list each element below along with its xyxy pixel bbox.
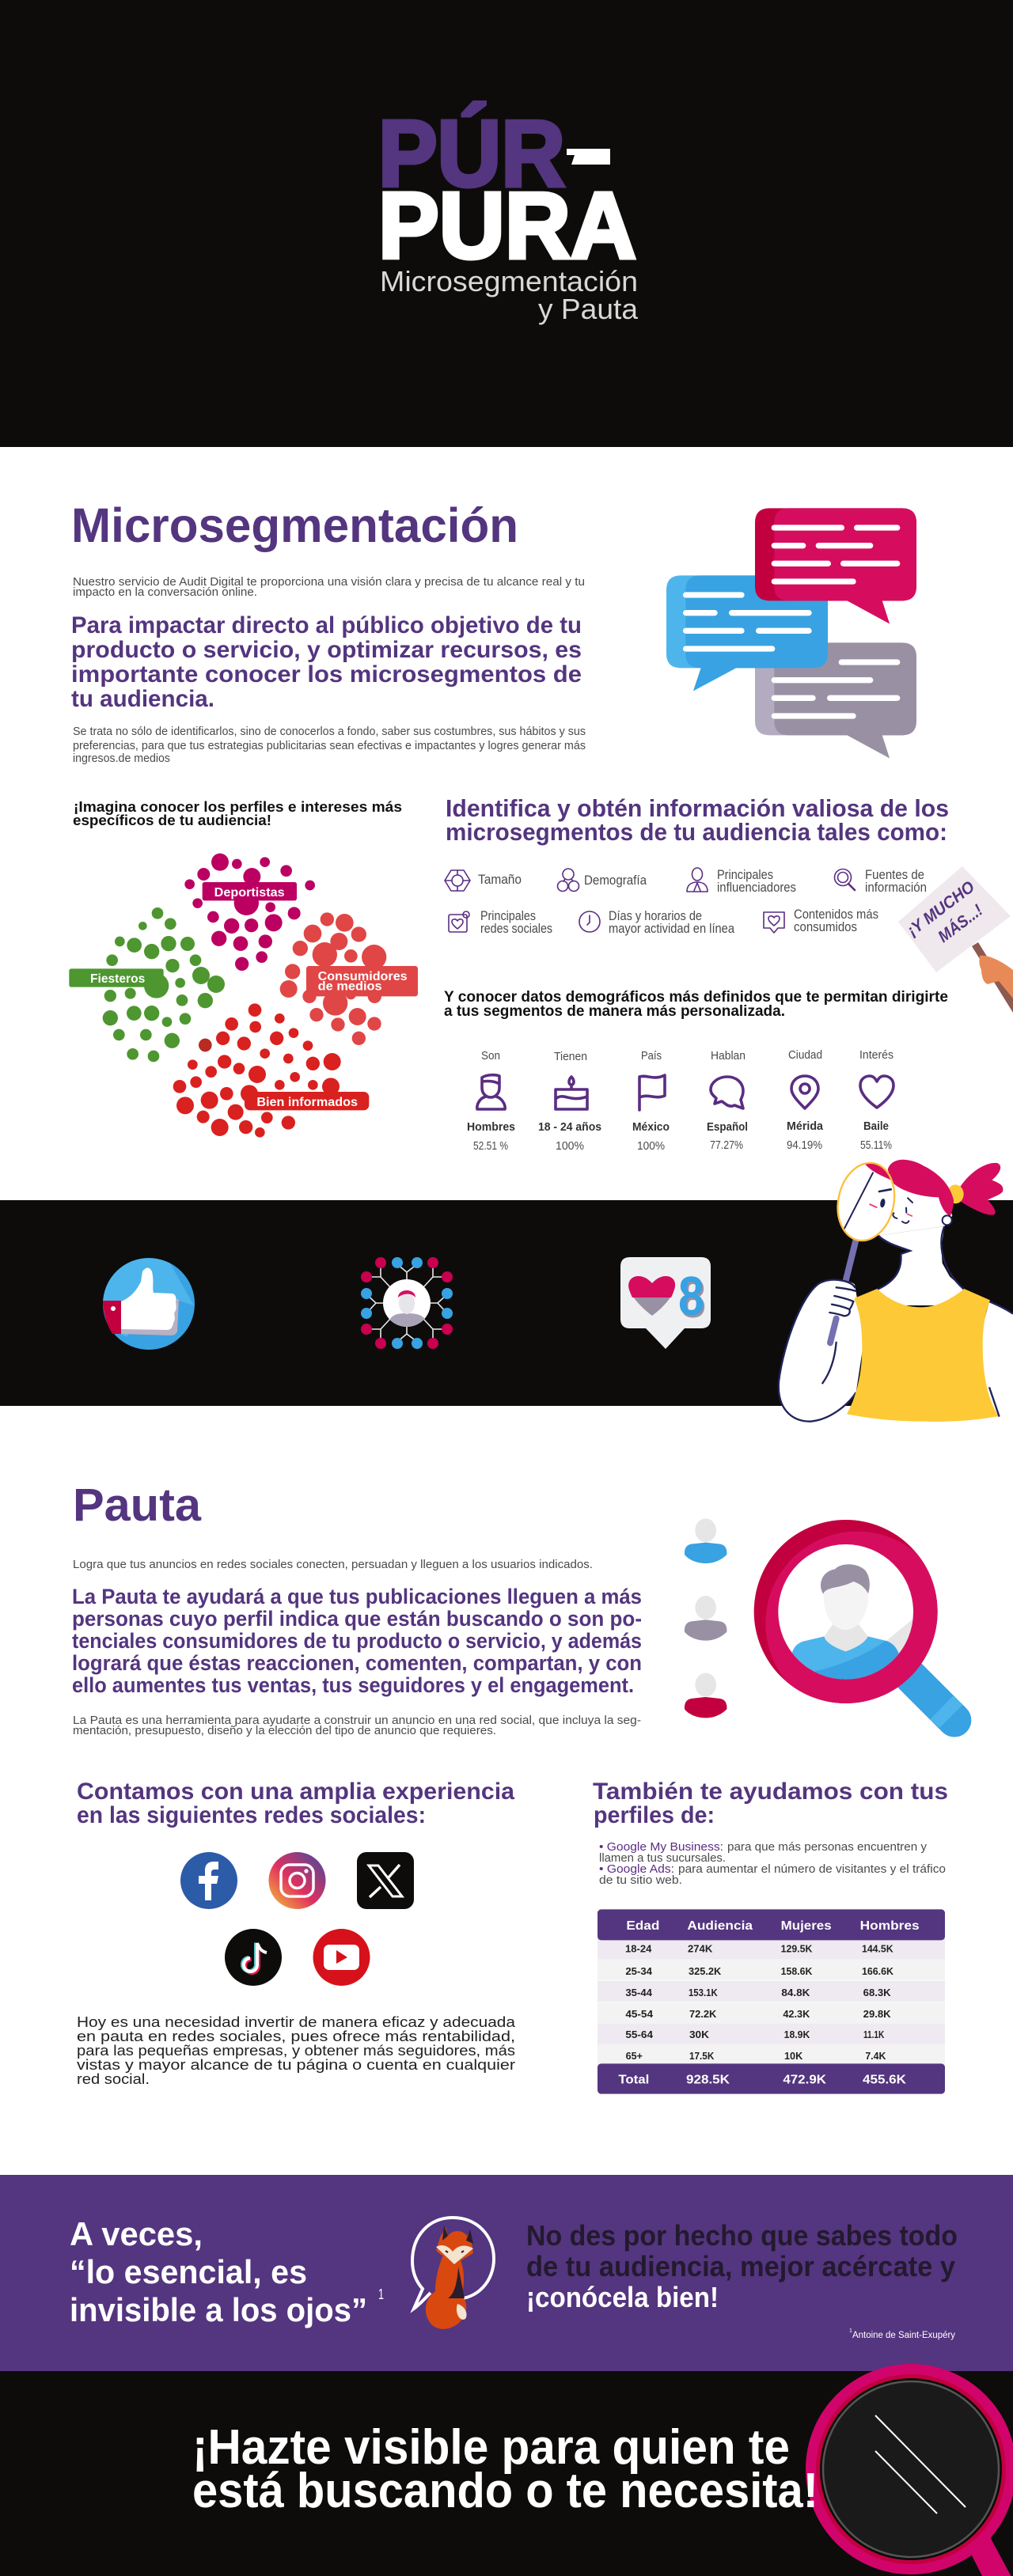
label: tamaño: Tamaño — [478, 873, 522, 887]
sign pole — [972, 942, 1013, 1013]
text block: no des por hecho: ¡conócela bien! — [526, 2281, 719, 2313]
heading: identifica y obtén información: Identifica y obtén información valiosa de los — [446, 794, 949, 822]
label: días y horarios — [609, 909, 735, 936]
chart: audience bubble clusters — [69, 854, 418, 1138]
table values: 55-64 — [625, 2029, 653, 2040]
table values: 129.5K — [781, 1943, 813, 1954]
cluster: Fiesteros — [69, 907, 225, 1062]
label: días y horarios: mayor actividad en línea — [609, 922, 735, 936]
person: blue — [685, 1518, 727, 1563]
arm and fingers lines — [822, 1287, 856, 1383]
quote: lo esencial: “lo esencial, es — [70, 2253, 307, 2290]
text block: pauta statement: La Pauta te ayudará a que tus publicaciones lleguen a más — [72, 1585, 642, 1608]
label: contenidos: consumidos — [794, 920, 857, 934]
face details — [893, 1198, 912, 1223]
heading: identifica y obtén información: microsegmentos de tu audiencia tales como: — [446, 818, 947, 846]
stat: Interés Baile: 55.11% — [860, 1139, 892, 1152]
stat: Interés Baile: Interés — [859, 1049, 893, 1062]
panel: bottom black band — [0, 2371, 1013, 2576]
table: audience by age — [598, 1909, 945, 2094]
speech bubble outline — [412, 2218, 494, 2309]
text block: no des por hecho: de tu audiencia, mejor acércate y — [526, 2250, 955, 2282]
glare lines — [875, 2415, 966, 2513]
lens glass — [823, 2381, 999, 2557]
table header: Edad — [626, 1919, 659, 1933]
text block: pauta statement: personas cuyo perfil indica que están buscando o son po- — [72, 1607, 642, 1631]
ponytail — [960, 1163, 1003, 1215]
table values: 10K — [784, 2051, 803, 2062]
hair tie — [947, 1184, 964, 1203]
stat: Hablan Español: Hablan — [711, 1050, 746, 1063]
stat: Ciudad Mérida: Ciudad — [788, 1049, 822, 1062]
list: google profiles: llamen a tus sucursales. — [599, 1851, 726, 1865]
fox tail tip — [457, 2304, 467, 2320]
logo word: PÚR: PÚR — [378, 101, 565, 206]
icon: tiktok — [225, 1929, 282, 1986]
table values: 35-44 — [625, 1987, 652, 1998]
quote: lo esencial: invisible a los ojos” — [70, 2291, 367, 2328]
illustration: protest sign with hand — [898, 866, 1013, 1013]
text block: no des por hecho — [526, 2219, 958, 2313]
table total: 472.9K — [783, 2073, 826, 2086]
table header: Mujeres — [781, 1919, 832, 1933]
list: google profiles: • Google My Business: — [599, 1840, 723, 1854]
handle — [967, 2536, 1013, 2576]
mirror handle — [830, 1240, 856, 1343]
label: días y horarios: Días y horarios de — [609, 909, 702, 923]
cluster: Deportistas — [184, 854, 315, 971]
cluster: Consumidores de medios — [280, 912, 418, 1045]
fox ears — [442, 2226, 473, 2244]
citation: 1 — [849, 2328, 852, 2334]
icon: fuentes de información — [834, 869, 855, 890]
cluster: Deportistas: Deportistas — [214, 886, 285, 900]
text block: intro: impacto en la conversación online. — [73, 586, 257, 599]
neck fill — [877, 1226, 964, 1305]
icons: social networks — [180, 1852, 414, 1986]
dark rim — [816, 2374, 1006, 2564]
table values — [625, 1943, 894, 2062]
stat: Son Hombres: Son — [481, 1050, 500, 1063]
lens — [820, 2378, 1002, 2560]
icon: like notification bubble: 8 — [680, 1267, 706, 1329]
panel: black band with icons — [0, 1200, 1013, 1406]
list: audience attributes — [445, 868, 927, 936]
subheading: imagina conocer los perfiles — [73, 799, 402, 828]
list: google profiles: para que más personas encuentren y — [727, 1840, 927, 1854]
table values: 18.9K — [784, 2029, 810, 2040]
stat: Hablan Español: Español — [707, 1121, 748, 1134]
fox face — [436, 2245, 473, 2264]
text block: intro: Nuestro servicio de Audit Digital te proporciona una visión clara y precisa de tu alcance real y tu — [73, 576, 585, 589]
text block: pauta explanation — [73, 1714, 641, 1737]
text block: explanation — [73, 725, 586, 765]
stat: País México: México — [632, 1121, 670, 1134]
text block: pauta intro: Logra que tus anuncios en redes sociales conecten, persuadan y lleguen a los usuarios indicados. — [73, 1558, 593, 1571]
shirt side line — [989, 1387, 1000, 1417]
illustration: girl with magnifying mirror — [779, 1157, 1013, 1422]
table total — [598, 2063, 945, 2094]
table values: 30K — [689, 2029, 710, 2040]
text block: necesidad de invertir: Hoy es una necesidad invertir de manera eficaz y adecuada — [77, 2013, 516, 2030]
text block: purple statement: tu audiencia. — [71, 686, 214, 712]
person in lens — [791, 1564, 914, 1688]
table values: 29.8K — [863, 2009, 892, 2020]
icon: influenciadores — [687, 868, 708, 892]
table values: 153.1K — [689, 1987, 718, 1998]
stats: demographic profile — [467, 1049, 893, 1153]
sign text second line: MÁS...! — [935, 901, 986, 946]
icon: instagram — [269, 1852, 326, 1909]
pink rim — [806, 2364, 1013, 2574]
stat: Son Hombres: 52.51 % — [473, 1140, 508, 1153]
label: influenciadores: Principales — [717, 868, 773, 882]
table values: 84.8K — [781, 1987, 810, 1998]
table header — [598, 1909, 945, 1940]
stat: Hablan Español: 77.27% — [710, 1139, 743, 1152]
table values: 45-54 — [625, 2009, 653, 2020]
cluster: Bien informados — [173, 1003, 369, 1138]
text block: purple statement: importante conocer los microsegmentos de — [71, 661, 582, 688]
label: redes sociales: Principales — [480, 909, 536, 923]
table values: 65+ — [626, 2051, 643, 2062]
left arm — [779, 1280, 865, 1422]
subheading: imagina conocer los perfiles: ¡Imagina conocer los perfiles e intereses más — [74, 799, 402, 815]
heading: también te ayudamos — [593, 1779, 948, 1828]
text block: datos demográficos: a tus segmentos de manera más personalizada. — [444, 1003, 785, 1020]
magnifier handle — [910, 1676, 963, 1728]
panel: purple quote band — [0, 2175, 1013, 2371]
cluster: Consumidores de medios: Consumidores — [318, 970, 408, 983]
table values: 72.2K — [689, 2009, 717, 2020]
right arm fill — [981, 1301, 1013, 1419]
table values: 11.1K — [863, 2029, 885, 2040]
fox body — [435, 2255, 464, 2301]
table values: 158.6K — [781, 1966, 813, 1977]
label: redes sociales — [480, 909, 552, 936]
bubble: red — [755, 508, 916, 623]
subheading: imagina conocer los perfiles: específicos de tu audiencia! — [73, 813, 271, 828]
hair — [888, 1160, 954, 1216]
text block: necesidad de invertir: red social. — [77, 2070, 150, 2087]
stat: Son Hombres — [467, 1050, 515, 1153]
icon: like notification bubble — [620, 1257, 711, 1349]
icon: tamaño — [445, 870, 470, 891]
sign board — [898, 866, 1011, 972]
person: grey — [685, 1596, 727, 1641]
table values: 42.3K — [783, 2009, 810, 2020]
table values: 25-34 — [625, 1966, 652, 1977]
text block: purple statement: producto o servicio, y optimizar recursos, es — [71, 637, 582, 663]
illustration: fox in speech bubble — [412, 2218, 494, 2329]
illustration: people and magnifier — [685, 1518, 963, 1728]
text block: no des por hecho: No des por hecho que sabes todo — [526, 2219, 958, 2252]
icon: redes sociales — [449, 911, 469, 932]
stat: Interés Baile: Baile — [863, 1120, 889, 1133]
icon: reloj — [579, 911, 600, 932]
closing headline: ¡Hazte visible para quien te — [192, 2420, 790, 2475]
icon: X — [357, 1852, 414, 1909]
neck outlines — [877, 1226, 1013, 1314]
text block: explanation: Se trata no sólo de identificarlos, sino de conocerlos a fondo, saber sus costumbres, sus hábitos y sus — [73, 725, 586, 738]
text block: pauta explanation: mentación, presupuesto, diseño y la elección del tipo de anuncio que requieres. — [73, 1725, 496, 1737]
panel: top black cover — [0, 0, 1013, 447]
fox head — [436, 2227, 473, 2264]
icon: demografía — [557, 869, 579, 891]
quote: lo esencial: 1 — [378, 2286, 384, 2302]
handle below hand — [830, 1319, 837, 1343]
cluster: Consumidores de medios: de medios — [318, 980, 382, 994]
text block: necesidad de invertir — [77, 2013, 516, 2087]
stat: País México — [632, 1050, 670, 1153]
icon: youtube — [313, 1929, 370, 1986]
ear — [943, 1215, 952, 1225]
heading: contamos con experiencia — [77, 1779, 514, 1828]
illustration: big magnifier — [806, 2364, 1013, 2576]
heading: Microsegmentación: Microsegmentación — [71, 498, 518, 552]
cluster: Fiesteros: Fiesteros — [90, 972, 145, 986]
fox tail — [426, 2290, 466, 2329]
text block: explanation: preferencias, para que tus estrategias publicitarias sean efectivas e impactantes y logres generar más — [73, 739, 586, 752]
mirror — [837, 1161, 896, 1242]
heading: también te ayudamos: perfiles de: — [594, 1802, 715, 1828]
list: google profiles: de tu sitio web. — [599, 1873, 682, 1887]
table total: 455.6K — [863, 2073, 906, 2086]
table values: 325.2K — [689, 1966, 722, 1977]
sign text: ¡Y MUCHO — [904, 877, 978, 940]
table total: Total — [618, 2073, 649, 2086]
icon: person network — [361, 1257, 453, 1349]
label: fuentes: Fuentes de — [865, 868, 924, 882]
person: red — [685, 1673, 727, 1718]
magnifier ring — [753, 1520, 938, 1703]
list: google profiles: • Google Ads: — [599, 1862, 674, 1876]
list: google profiles — [599, 1840, 946, 1887]
heading: también te ayudamos: También te ayudamos con tus — [593, 1779, 948, 1805]
text block: explanation: ingresos.de medios — [73, 752, 170, 765]
label: demografía: Demografía — [584, 873, 647, 888]
heading: contamos con experiencia: en las siguientes redes sociales: — [77, 1802, 426, 1828]
subtitle second line: y Pauta — [538, 293, 639, 325]
table values: 17.5K — [689, 2051, 715, 2062]
label: contenidos — [794, 907, 878, 934]
stat: Tienen 18-24: Tienen — [554, 1051, 587, 1063]
stat: Son Hombres: Hombres — [467, 1121, 515, 1134]
logo dash — [567, 149, 610, 165]
citation: Antoine de Saint-Exupéry — [852, 2331, 955, 2340]
logo word: PURA: PURA — [378, 173, 636, 278]
text block: pauta statement: tenciales consumidores de tu producto o servicio, y además — [72, 1629, 642, 1653]
head fill — [876, 1173, 952, 1236]
table values: 166.6K — [862, 1966, 894, 1977]
text block: datos demográficos — [444, 989, 948, 1020]
label: fuentes — [865, 868, 927, 895]
stat: Interés Baile — [859, 1049, 893, 1152]
stat: Tienen 18-24 — [538, 1051, 601, 1153]
text block: datos demográficos: Y conocer datos demográficos más definidos que te permitan dirigirte — [444, 989, 948, 1006]
icon: thumbs up — [103, 1258, 195, 1350]
text block: necesidad de invertir: vistas y mayor alcance de tu página o cuenta en cualquier — [77, 2056, 515, 2073]
label: redes sociales: redes sociales — [480, 922, 552, 936]
stat: Tienen 18-24: 100% — [556, 1140, 584, 1153]
icon: contenidos — [764, 912, 784, 933]
label: contenidos: Contenidos más — [794, 907, 878, 922]
heading: Pauta: Pauta — [73, 1479, 202, 1531]
text block: purple statement: Para impactar directo al público objetivo de tu — [71, 612, 582, 638]
text block: pauta explanation: La Pauta es una herramienta para ayudarte a construir un anuncio en una red social, que incluya la seg- — [73, 1714, 641, 1727]
list: google profiles: para aumentar el número de visitantes y el tráfico — [678, 1862, 946, 1876]
bubble: blue — [666, 575, 828, 691]
fox eyes and nose — [446, 2251, 464, 2252]
heading: identifica y obtén información — [446, 794, 949, 846]
stat: Ciudad Mérida: Mérida — [787, 1120, 824, 1133]
text block: pauta statement: ello aumentes tus ventas, tus seguidores y el engagement. — [72, 1673, 634, 1697]
table values: 274K — [688, 1943, 713, 1954]
closing headline — [192, 2420, 818, 2518]
shirt — [847, 1289, 999, 1422]
stat: Ciudad Mérida — [787, 1049, 824, 1152]
table values: 144.5K — [862, 1943, 893, 1954]
fox chest shadow — [448, 2267, 465, 2298]
quote: lo esencial — [70, 2215, 384, 2328]
table rows background — [598, 1936, 945, 2068]
table values: 7.4K — [865, 2051, 886, 2062]
stat: Hablan Español — [707, 1050, 748, 1152]
icon: speech bubbles — [666, 508, 916, 758]
cluster: Bien informados: Bien informados — [256, 1096, 358, 1109]
closing headline: está buscando o te necesita! — [192, 2464, 818, 2518]
text block: pauta statement — [72, 1585, 642, 1697]
label: fuentes: información — [865, 881, 927, 895]
hand — [979, 956, 1013, 998]
text block: intro — [73, 576, 585, 599]
text block: purple statement — [71, 612, 582, 712]
subtitle: Microsegmentación — [380, 265, 638, 297]
stat: País México: País — [641, 1050, 662, 1063]
left arm outline — [779, 1280, 856, 1422]
stat: Ciudad Mérida: 94.19% — [787, 1139, 822, 1152]
text block: necesidad de invertir: para las pequeñas empresas, y obtener más seguidores, más — [77, 2042, 515, 2059]
bubble: grey — [755, 642, 916, 758]
text block: pauta statement: logrará que éstas reaccionen, comenten, compartan, y con — [72, 1651, 642, 1675]
label: influenciadores: influenciadores — [717, 881, 796, 895]
table values: 18-24 — [625, 1943, 651, 1954]
quote: lo esencial: A veces, — [70, 2215, 203, 2252]
label: influenciadores — [717, 868, 796, 895]
heading: contamos con experiencia: Contamos con una amplia experiencia — [77, 1779, 514, 1805]
table values: 68.3K — [863, 1987, 892, 1998]
icon: like notification bubble: 8 — [678, 1265, 704, 1327]
table total: 928.5K — [686, 2073, 730, 2086]
text block: necesidad de invertir: en pauta en redes sociales, pues ofrece más rentabilidad, — [77, 2028, 515, 2044]
table header: Audiencia — [687, 1919, 753, 1933]
stat: Tienen 18-24: 18 - 24 años — [538, 1121, 601, 1134]
logo and subtitle — [378, 101, 639, 325]
table header: Hombres — [860, 1919, 920, 1933]
icon: facebook — [180, 1852, 237, 1909]
stat: País México: 100% — [637, 1140, 665, 1153]
